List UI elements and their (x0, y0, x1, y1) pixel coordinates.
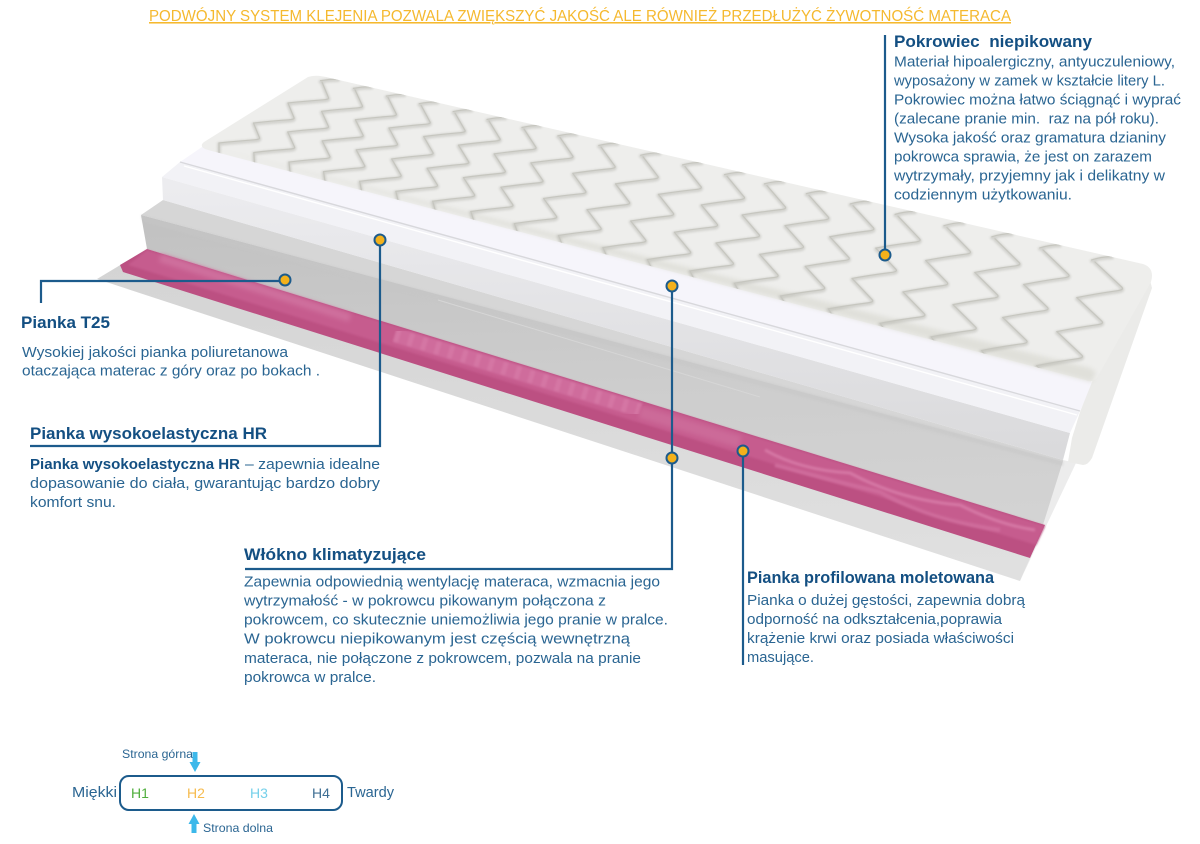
mattress illustration (97, 76, 1200, 581)
body text: komfort snu. (30, 495, 116, 511)
heading: Pianka T25 (21, 313, 110, 332)
base layer (97, 249, 1045, 581)
pink profiled foam (120, 249, 1045, 558)
marker (280, 274, 290, 286)
label: top side: Strona górna (122, 747, 193, 761)
body text: Pianka wysokoelastyczna HR (30, 457, 241, 473)
body text: odporność na odkształcenia,poprawia (747, 612, 1003, 628)
marker (374, 234, 386, 246)
scale box (120, 776, 342, 810)
body text: Materiał hipoalergiczny, antyuczuleniowy, (894, 54, 1175, 70)
label: H4: H4 (312, 785, 330, 801)
body text: materaca, nie połączone z pokrowcem, pozwala na pranie (244, 651, 641, 667)
right side sliver (1020, 460, 1076, 581)
body text: codziennym użytkowaniu. (894, 188, 1072, 204)
heading: Włókno klimatyzujące (244, 545, 426, 564)
body text (30, 457, 381, 511)
body text: W pokrowcu niepikowanym jest częścią wewnętrzną (244, 632, 631, 648)
body text: otaczająca materac z góry oraz po bokach . (22, 364, 320, 380)
grey foam top surface (141, 200, 1063, 462)
body text (22, 345, 320, 380)
label: H3: H3 (250, 785, 268, 801)
body text (747, 593, 1026, 666)
white foam HR top (162, 162, 1080, 433)
body text: (zalecane pranie min. raz na pół roku). (894, 112, 1159, 128)
body text: Wysokiej jakości pianka poliuretanowa (22, 345, 289, 361)
cover right side (1068, 280, 1152, 465)
label: hard: Twardy (347, 784, 394, 801)
label: H1: H1 (131, 785, 149, 801)
marker: lower (666, 452, 678, 464)
label: soft: Miękki (72, 784, 117, 801)
body text: Pokrowiec można łatwo ściągnąć i wyprać (894, 92, 1181, 108)
body text: pokrowca sprawia, że jest on zarazem (894, 150, 1152, 166)
callout: Pianka profilowana moletowana (738, 446, 1026, 666)
heading: Pianka profilowana moletowana (747, 568, 995, 587)
callout: Pianka T25 (21, 274, 320, 380)
body text: wytrzymałość - w pokrowcu pikowanym połączona z (243, 594, 606, 610)
body text: masujące. (747, 650, 814, 666)
body text: Pianka o dużej gęstości, zapewnia dobrą (747, 593, 1026, 609)
body text (243, 574, 668, 686)
quilting pattern (216, 78, 1124, 368)
upper climate fibre strip (180, 147, 1092, 411)
callout: Pokrowiec niepikowany (880, 32, 1181, 260)
quilted cover top (189, 76, 1200, 382)
grey foam T25 front (141, 215, 1063, 525)
title: PODWÓJNY SYSTEM KLEJENIA POZWALA ZWIĘKSZYĆ JAKOŚĆ ALE RÓWNIEŻ PRZEDŁUŻYĆ ŻYWOTNOŚĆ MATERACA (149, 7, 1012, 25)
leader line (41, 281, 285, 303)
callout: Pianka wysokoelastyczna HR (30, 234, 386, 511)
body text: krążenie krwi oraz posiada właściwości (747, 631, 1014, 647)
leader line (742, 451, 744, 665)
label: H2: H2 (187, 785, 205, 801)
white foam HR front (162, 177, 1070, 460)
leader line (245, 286, 672, 569)
body text: – zapewnia idealne (245, 457, 380, 473)
marker (738, 446, 748, 456)
heading: Pokrowiec niepikowany (894, 32, 1093, 51)
label: bottom side: Strona dolna (203, 821, 273, 835)
arrow: bottom side (188, 814, 200, 833)
heading: Pianka wysokoelastyczna HR (30, 424, 267, 443)
callout: Włókno klimatyzujące (243, 280, 678, 686)
leader line (30, 240, 380, 446)
arrow: top side (190, 752, 200, 772)
body text: dopasowanie do ciała, gwarantując bardzo dobry (30, 476, 381, 492)
body text (893, 54, 1181, 204)
body text: Zapewnia odpowiednią wentylację materaca, wzmacnia jego (244, 574, 660, 590)
marker (880, 250, 890, 260)
body text: pokrowcem, co skutecznie uniemożliwia jego pranie w pralce. (244, 612, 668, 628)
leader line (884, 35, 886, 255)
firmness scale (72, 747, 394, 835)
marker: upper (666, 280, 678, 292)
body text: wytrzymały, przyjemny jak i delikatny w (893, 168, 1166, 184)
body text: Wysoka jakość oraz gramatura dzianiny (894, 130, 1167, 146)
body text: wyposażony w zamek w kształcie litery L. (893, 74, 1165, 90)
body text: pokrowca w pralce. (244, 670, 376, 686)
